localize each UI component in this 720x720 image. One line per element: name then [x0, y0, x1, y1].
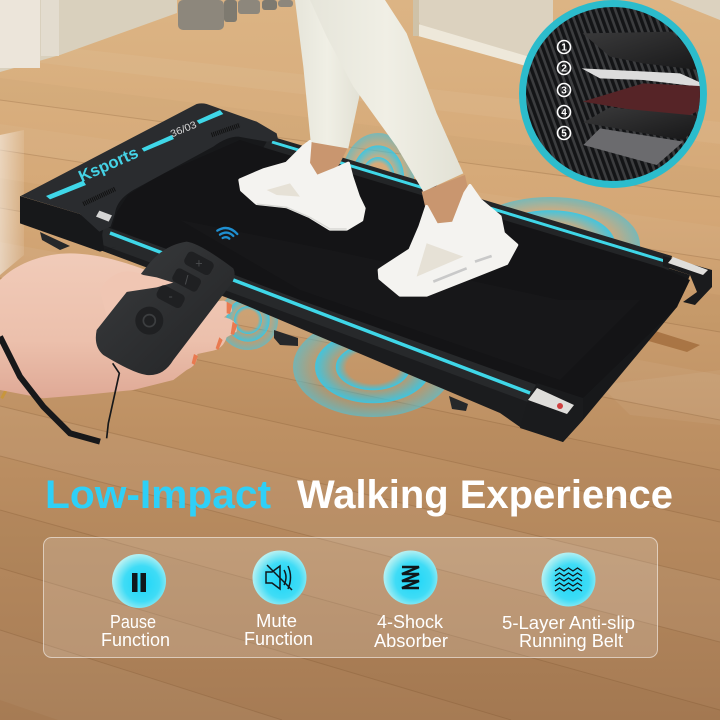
feature: mute: [244, 550, 313, 649]
back ankle: [308, 142, 347, 178]
mode button: [171, 267, 202, 293]
treadmill: [20, 103, 712, 442]
remote body: [96, 242, 235, 375]
far LED strip: [272, 142, 668, 262]
layer numbers: [558, 40, 570, 140]
belt layers: [582, 32, 713, 165]
curtain folds: [178, 0, 293, 30]
feature: 5-layer belt: 5-Layer Anti-slip: [502, 613, 635, 633]
feature: pause: Function: [101, 630, 170, 650]
console: [20, 103, 278, 252]
feature: mute: Mute: [256, 611, 297, 631]
feature: mute: Function: [244, 629, 313, 649]
brand logo: Ksports: [76, 143, 141, 186]
feature panel: [44, 538, 658, 658]
ripple: left: [218, 290, 278, 350]
minus button: [155, 284, 186, 310]
treadmill feet: [40, 232, 468, 411]
strap cord: [107, 363, 119, 438]
far rail: [262, 136, 672, 272]
title: Low-Impact: [45, 473, 271, 517]
far end cap: [663, 256, 712, 305]
inset ring: [522, 4, 704, 184]
layer numbers: 1: [561, 42, 567, 54]
console LED strips: [46, 110, 223, 199]
feature: 4-shock absorber: Absorber: [374, 631, 448, 651]
title: Walking Experience: [297, 473, 673, 517]
plus button: [183, 250, 215, 277]
layer numbers: 4: [561, 108, 567, 118]
back shoe: [240, 142, 364, 229]
console vents: [83, 125, 240, 204]
front shoe: [379, 186, 517, 295]
finger nails: [192, 302, 237, 365]
console front: [20, 196, 117, 252]
plus button: +: [195, 256, 203, 270]
layer numbers: 3: [561, 86, 567, 96]
QR label: [96, 211, 112, 222]
left curtain and wall: [0, 0, 177, 72]
ripple: right: [460, 197, 640, 293]
near rail top: [100, 226, 540, 402]
floor sound ripples: [218, 133, 640, 417]
front ankle: [422, 175, 468, 227]
right wall: [413, 0, 720, 66]
layer numbers: 2: [561, 64, 567, 74]
left floor reflection: [0, 130, 24, 275]
front shoe mesh: [417, 243, 463, 277]
back shoe mesh: [267, 183, 300, 197]
near end label: [528, 388, 574, 414]
feature: pause: [101, 554, 170, 650]
hand with remote: [0, 242, 237, 442]
feature: pause: Pause: [110, 612, 156, 632]
wrist strap: [0, 337, 100, 442]
feature: 4-shock absorber: [374, 550, 448, 651]
ripple: back: [342, 133, 414, 223]
mode button: /: [185, 274, 189, 288]
near end cap: [520, 383, 583, 442]
thumb over remote: [100, 271, 173, 317]
ripple: front: [293, 317, 453, 417]
feature: 5-layer belt: Running Belt: [519, 631, 623, 651]
title: [45, 473, 673, 517]
running belt: [112, 140, 690, 398]
front leg: [310, 0, 463, 192]
minus button: -: [169, 290, 173, 304]
inset: five layer belt: [522, 4, 713, 184]
near rail side: [100, 235, 583, 442]
hand: [0, 253, 237, 398]
back leg: [295, 0, 360, 149]
near LED strip: [110, 233, 530, 393]
feature: 5-layer belt: [502, 552, 635, 651]
console top: [21, 103, 278, 232]
treadmill base: [100, 130, 690, 420]
feature: 4-shock absorber: 4-Shock: [377, 612, 444, 632]
power button: [135, 307, 163, 335]
model number: 36/03: [169, 119, 199, 140]
legs and shoes: [240, 0, 517, 295]
gold bracelet: [2, 343, 13, 398]
wifi icon: [217, 228, 237, 239]
layer numbers: 5: [561, 128, 567, 140]
thumb nail: [149, 269, 174, 283]
far end label: [668, 257, 708, 275]
